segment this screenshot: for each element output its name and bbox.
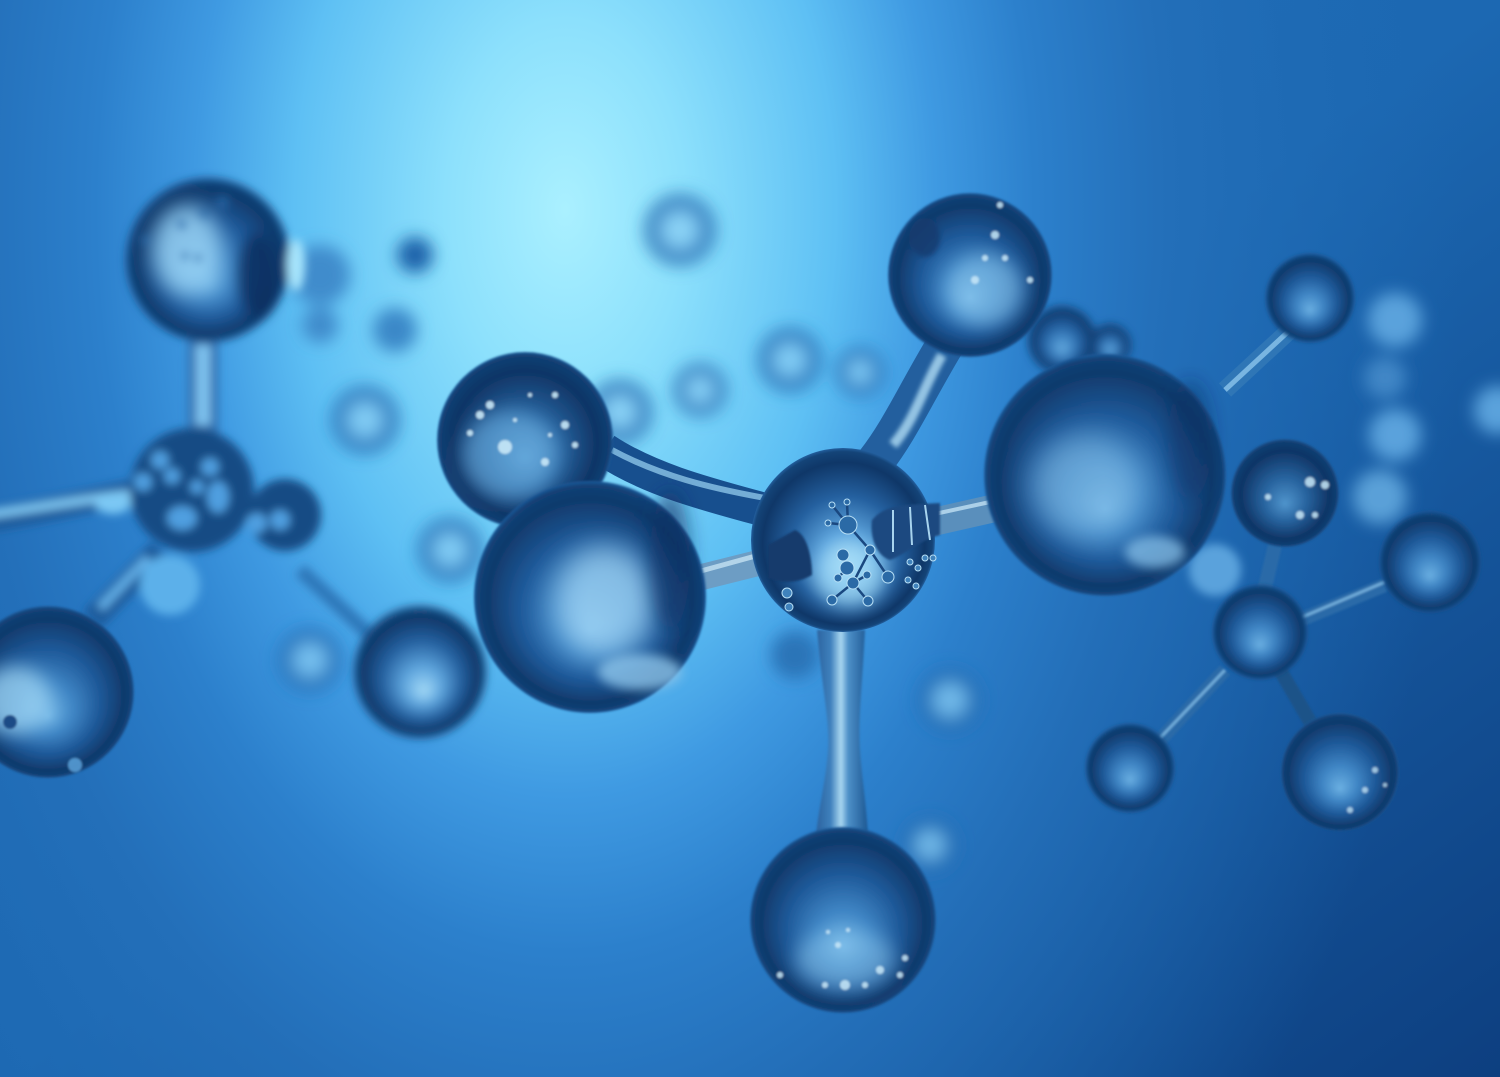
sphere: lower right bbox=[1281, 713, 1399, 831]
left molecule, out of focus bbox=[0, 178, 375, 640]
sphere: central hub with tiny molecules bbox=[751, 448, 940, 632]
right bond cap inside sphere bbox=[872, 503, 940, 560]
sphere: lower left bbox=[354, 606, 486, 738]
bond: vertical stem bbox=[816, 630, 868, 835]
sphere: big right bbox=[984, 354, 1226, 596]
sphere: blurred under hub bbox=[140, 555, 200, 615]
left bond cap inside sphere bbox=[768, 530, 812, 582]
sphere: upper centre bbox=[437, 352, 613, 528]
sphere: bottom centre bbox=[750, 827, 936, 1013]
sphere: top left bbox=[126, 178, 305, 342]
right molecule bonds bbox=[1160, 545, 1385, 740]
sphere: left hub bbox=[95, 428, 321, 552]
sphere: upper right bbox=[1266, 254, 1354, 342]
sphere: lower right small bbox=[1086, 724, 1174, 812]
sphere: top right of centre bbox=[888, 193, 1052, 357]
sphere: large centre left bbox=[474, 481, 706, 713]
sphere: right with bubbles bbox=[1231, 439, 1339, 547]
mid-depth molecules bbox=[1028, 306, 1241, 596]
sphere: bottom left bbox=[0, 606, 134, 778]
central molecule bonds bbox=[605, 330, 1290, 580]
blurred background molecules bbox=[276, 192, 1500, 875]
left molecule bonds bbox=[0, 335, 375, 640]
tiny molecule bbox=[782, 499, 936, 611]
sphere: right hub bbox=[1213, 585, 1307, 679]
sphere: far right bbox=[1380, 512, 1480, 612]
